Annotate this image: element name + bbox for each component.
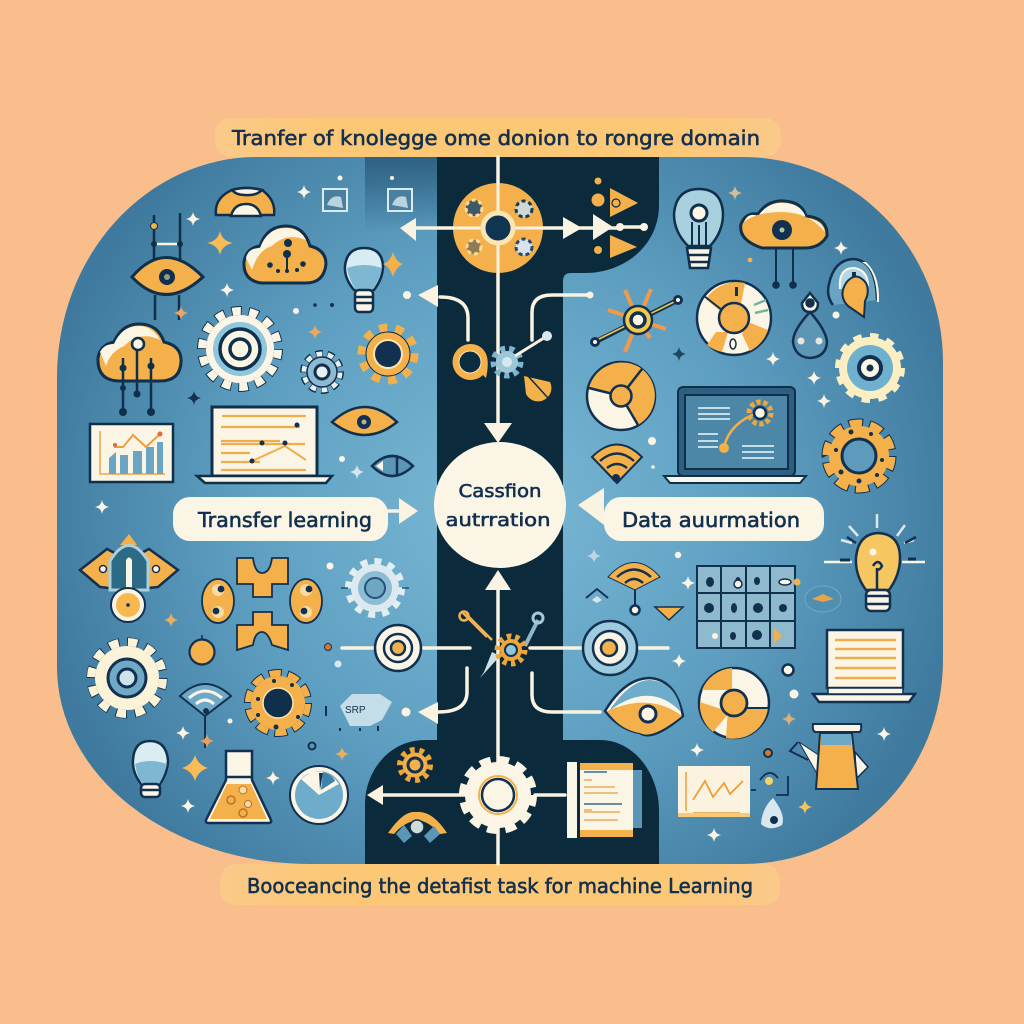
icon: large cream gear: [202, 311, 278, 387]
icon: blue node gear: [494, 331, 552, 375]
icon: light bulb right top: [674, 189, 723, 268]
chart: line chart bottom: [678, 766, 750, 817]
icon: bright bulb: [824, 514, 925, 611]
icon: sun key node: [590, 289, 683, 352]
icon: orange cog right: [826, 423, 892, 489]
footer banner: [220, 864, 780, 905]
heading: bottom title: Booceancing the detafist task for machine Learning: [247, 874, 753, 898]
icon: half dial with bubble: [828, 259, 879, 317]
icon: orange leaf: [524, 376, 551, 401]
icon: small connected nodes: [751, 749, 788, 828]
icon: wifi top right: [592, 444, 642, 483]
icon: cloud eye: [741, 201, 827, 289]
icon: dome: [216, 188, 274, 216]
icon: central orange node gear: [460, 612, 543, 678]
icon: blue blob: [805, 586, 841, 612]
panel: top shaded square: [365, 157, 437, 232]
icon: rocket emblem: [80, 534, 178, 622]
icon: cloud one: [244, 226, 326, 283]
callout: transfer learning pill: [173, 497, 388, 541]
icon: big cream gear centre bottom: [463, 760, 533, 830]
icon: target right: [583, 621, 637, 675]
icon: stars and dots top left: [95, 185, 403, 514]
icon: water drop: [793, 293, 827, 358]
label: central circle text: Cassfion: [458, 481, 542, 502]
icon: light bulb left top: [345, 248, 383, 312]
node: top orange hub: [453, 183, 543, 273]
icon: segmented wheel top right: [697, 281, 771, 355]
icon: outline eye: [372, 456, 413, 476]
icon: speech bubble node: [453, 344, 488, 380]
icon: triangle markers: [592, 178, 638, 258]
icon: target left: [324, 625, 421, 671]
icon: flask: [206, 751, 271, 823]
callout: data augmentation pill: [604, 497, 824, 541]
icon: dark-centred orange gear: [248, 673, 308, 733]
chart: segmented wheel bottom right: [699, 668, 769, 739]
label: data augmentation: Data auurmation: [622, 508, 800, 532]
chart: pie right: [587, 362, 655, 430]
icon: small eye dark area: [388, 812, 447, 843]
label: transfer learning: Transfer learning: [197, 508, 372, 532]
icon: stars bottom left: [164, 562, 349, 813]
icon: puzzle pieces with ovals: [202, 558, 322, 650]
node: central circle: [434, 442, 566, 568]
panel: dark central column: [365, 157, 659, 864]
icon: document dark area: [567, 762, 642, 838]
icon: small blue gear: [304, 354, 340, 390]
chart: bar and line: [90, 424, 173, 482]
icon: orange gear left: [362, 328, 414, 380]
node: central circle: autrration: [446, 510, 550, 531]
icon: large eye: [605, 678, 683, 735]
icon: eye centre left: [332, 407, 397, 435]
icon: pale blue gear: [341, 562, 409, 614]
icon: orange circle: [190, 635, 214, 664]
connector lines and arrows: [342, 157, 668, 864]
icon: wifi orange right: [586, 562, 683, 620]
icon: laptop bottom right: [813, 630, 915, 702]
chart: image grid: [697, 566, 800, 648]
panel: main rounded blue panel: [57, 157, 943, 864]
icon: small bulb bottom left: [133, 741, 168, 797]
icon: eye with wires: [132, 213, 203, 320]
icon: cloud two with circuit: [98, 324, 181, 416]
icon: kettle: [790, 724, 868, 789]
header banner: [215, 118, 781, 157]
icon: sparkles top right: [648, 186, 848, 469]
icon: fragmented puzzle: [326, 694, 392, 731]
icon: stars bottom right: [587, 549, 891, 842]
icon: cream gear right: [839, 337, 901, 399]
icon: laptop with screen right: [664, 387, 806, 483]
icon: fragmented puzzle: SRP: [345, 705, 366, 716]
icon: cream gear bottom left: [91, 642, 163, 714]
icon: wifi bottom left: [180, 684, 231, 748]
icon: image tiles: [323, 176, 412, 211]
icon: laptop with document left: [197, 407, 332, 483]
icon: small orange gear dark area: [400, 750, 430, 780]
heading: top title: Tranfer of knolegge ome donion to rongre domain: [231, 126, 760, 150]
chart: circular gauge: [290, 742, 348, 824]
